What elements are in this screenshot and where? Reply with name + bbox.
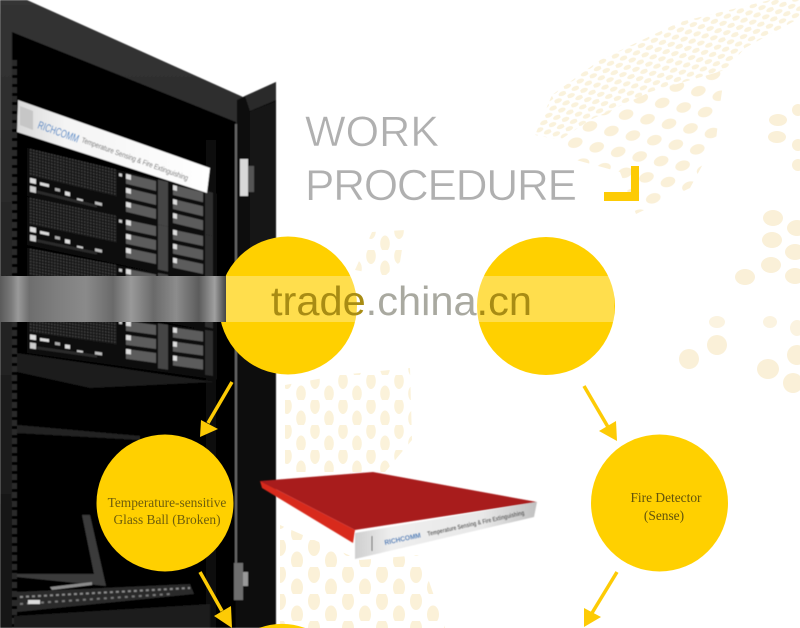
fire detector label: Fire Detector [630, 490, 702, 505]
mounting rail perforations [12, 60, 17, 628]
server units [27, 148, 217, 380]
background dotted globe pattern [280, 0, 800, 628]
unit front plate [355, 502, 537, 559]
door edge highlight [235, 124, 237, 600]
nameplate logo: RICHCOMM [36, 120, 80, 146]
rack frame [0, 0, 245, 628]
title corner accent [604, 166, 639, 201]
glass ball label: Glass Ball (Broken) [113, 512, 221, 527]
door top edge [245, 82, 276, 111]
step circle: fire detector [591, 434, 728, 572]
nameplate caption: Temperature Sensing & Fire Extinguishing [80, 135, 190, 183]
band smear over rack [0, 276, 226, 322]
keyboard [17, 584, 194, 612]
right rail [206, 140, 216, 628]
title [305, 108, 577, 210]
door inner panel [250, 102, 275, 258]
shelf under servers [17, 353, 215, 388]
watermark text: trade.china.cn [271, 278, 532, 324]
arrow: fire detector downward [584, 572, 617, 627]
plate logo: RICHCOMM [384, 532, 422, 547]
arrow: top right to fire detector [584, 386, 617, 441]
plate caption: Temperature Sensing & Fire Extinguishing [427, 510, 525, 538]
monitor [17, 515, 106, 590]
lower tray [14, 604, 210, 628]
open door [237, 82, 276, 628]
step circle: bottom, cut off [259, 624, 305, 628]
rack interior [12, 32, 236, 628]
band tint [226, 276, 614, 322]
glass ball label: Temperature-sensitive [108, 495, 226, 510]
plate divider [371, 536, 373, 551]
server rack cabinet [0, 0, 276, 628]
title line 2: PROCEDURE [305, 161, 577, 210]
watermark band [0, 276, 614, 324]
door upper hinge [240, 159, 254, 196]
step circle: top left [219, 236, 357, 374]
fire detector label: (Sense) [644, 508, 684, 523]
arrow: top left to glass ball [200, 382, 232, 437]
band clearing between circles [358, 276, 476, 322]
nameplate bar [17, 100, 210, 193]
unit side face [260, 481, 355, 543]
unit top face [260, 472, 537, 530]
title line 1: WORK [305, 108, 439, 156]
product: red extinguishing unit [260, 472, 537, 559]
step circle: glass ball [96, 434, 234, 572]
arrow: glass ball to bottom [200, 572, 232, 628]
door lower hinge [234, 563, 248, 600]
step circle: top right [477, 237, 615, 375]
monitor shelf [17, 425, 140, 440]
